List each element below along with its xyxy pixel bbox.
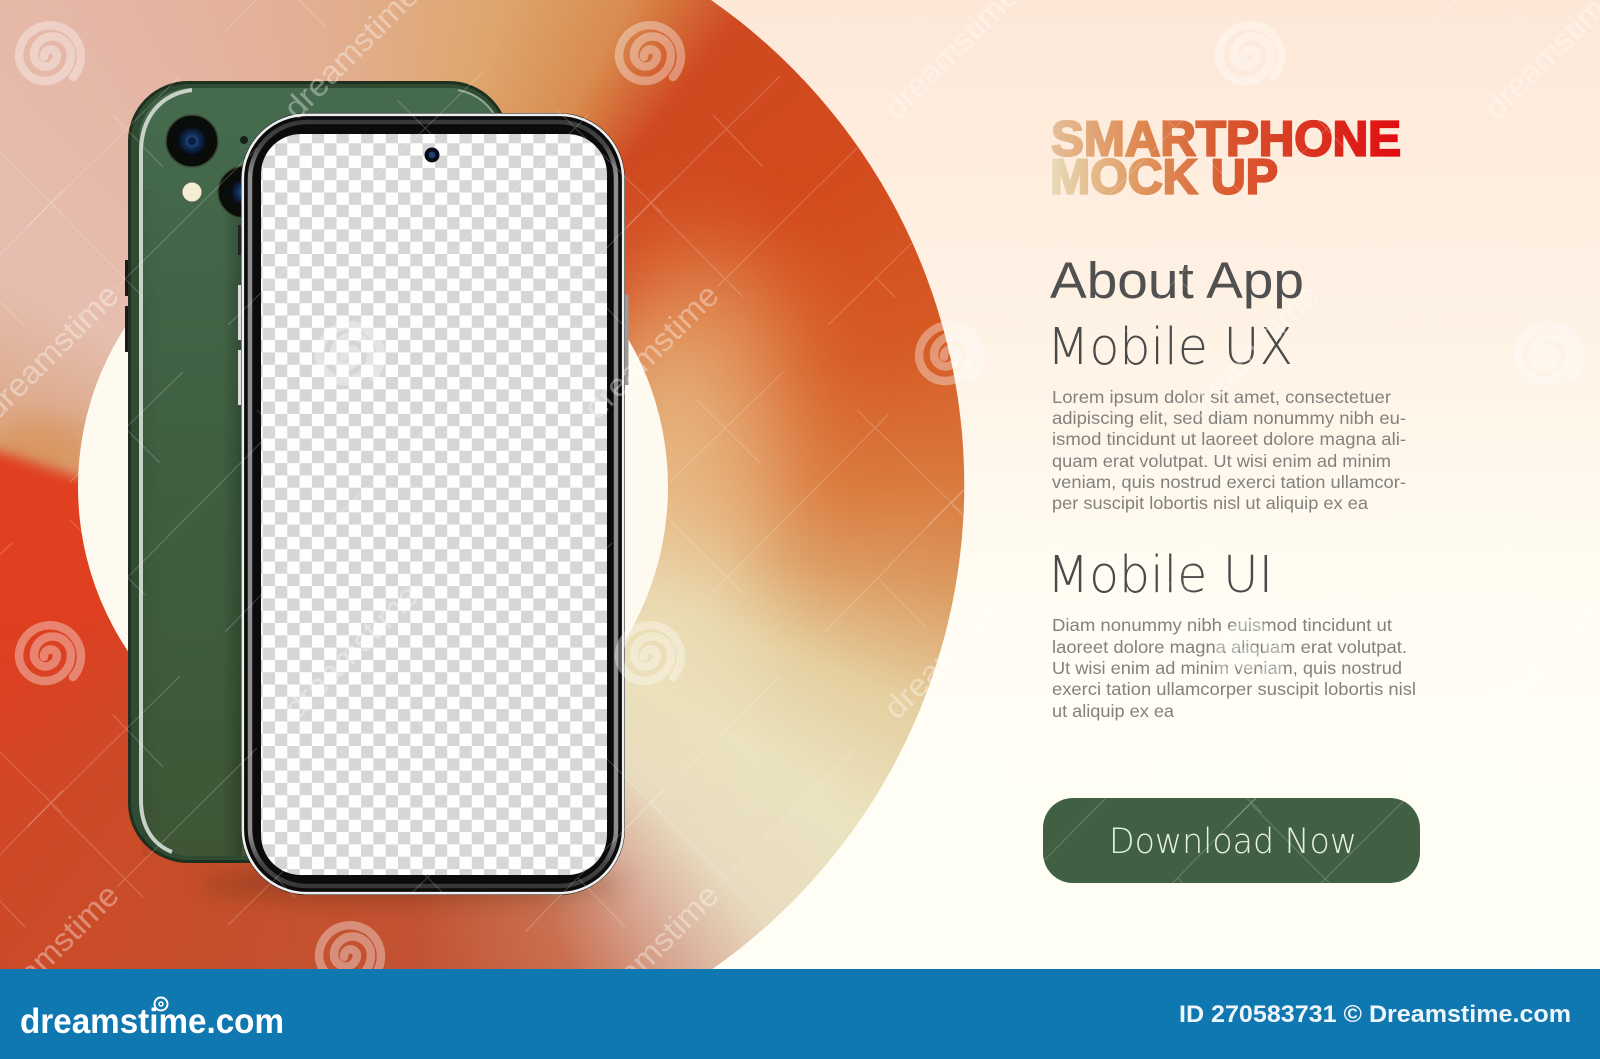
paragraph: Mobile UX: Lorem ipsum dolor sit amet, consectetuer — [1052, 387, 1391, 407]
paragraph: Mobile UX: quam erat volutpat. Ut wisi enim ad minim — [1052, 451, 1391, 471]
watermark text: dreamstime — [1176, 277, 1326, 426]
watermark text: dreamstime — [876, 577, 1026, 726]
heading: About App: About App — [1050, 252, 1304, 309]
inner cream circle — [78, 192, 668, 782]
watermark text: dreamstime — [276, 577, 426, 726]
paragraph: Mobile UX: per suscipit lobortis nisl ut aliquip ex ea — [1052, 493, 1368, 513]
paragraph: Mobile UI: exerci tation ullamcorper suscipit lobortis nisl — [1052, 679, 1416, 699]
paragraph: Mobile UX — [1052, 387, 1406, 513]
footer banner — [0, 969, 1600, 1059]
paragraph: Mobile UI: Diam nonummy nibh euismod tincidunt ut — [1052, 615, 1392, 635]
watermark text: dreamstime — [576, 277, 726, 426]
phone shadow — [195, 870, 625, 898]
paragraph: Mobile UX: ismod tincidunt ut laoreet dolore magna ali- — [1052, 429, 1406, 449]
back phone — [125, 81, 509, 863]
button: Download Now: Download Now — [1109, 822, 1357, 862]
title: SMARTPHONE — [1051, 112, 1401, 166]
paragraph: Mobile UI: ut aliquip ex ea — [1052, 701, 1174, 721]
front camera — [424, 148, 440, 162]
paragraph: Mobile UX: adipiscing elit, sed diam nonummy nibh eu- — [1052, 408, 1406, 428]
heading: Mobile UI: Mobile UI — [1047, 546, 1273, 605]
paragraph: Mobile UI — [1052, 615, 1416, 721]
title: MOCK UP — [1050, 150, 1278, 204]
heading: Mobile UX: Mobile UX — [1047, 318, 1293, 377]
watermark text: dreamstime — [576, 877, 726, 1026]
microphone dot — [240, 136, 248, 144]
image id credit: ID 270583731 © Dreamstime.com — [1179, 1001, 1571, 1028]
front phone — [238, 113, 628, 895]
logo: dreamstime.com: dreamstime.com — [20, 1002, 284, 1041]
paragraph: Mobile UI: laoreet dolore magna aliquam erat volutpat. — [1052, 637, 1407, 657]
checkerboard screen — [261, 134, 607, 875]
paragraph: Mobile UX: veniam, quis nostrud exerci tation ullamcor- — [1052, 472, 1406, 492]
gradient ring — [0, 0, 964, 969]
rear camera bottom — [218, 166, 270, 218]
rear camera top — [166, 115, 218, 167]
button: Download Now — [1043, 798, 1420, 883]
camera flash — [182, 182, 202, 202]
title — [1050, 112, 1401, 204]
watermark text: dreamstime — [1176, 877, 1326, 1026]
paragraph: Mobile UI: Ut wisi enim ad minim veniam, quis nostrud — [1052, 658, 1402, 678]
